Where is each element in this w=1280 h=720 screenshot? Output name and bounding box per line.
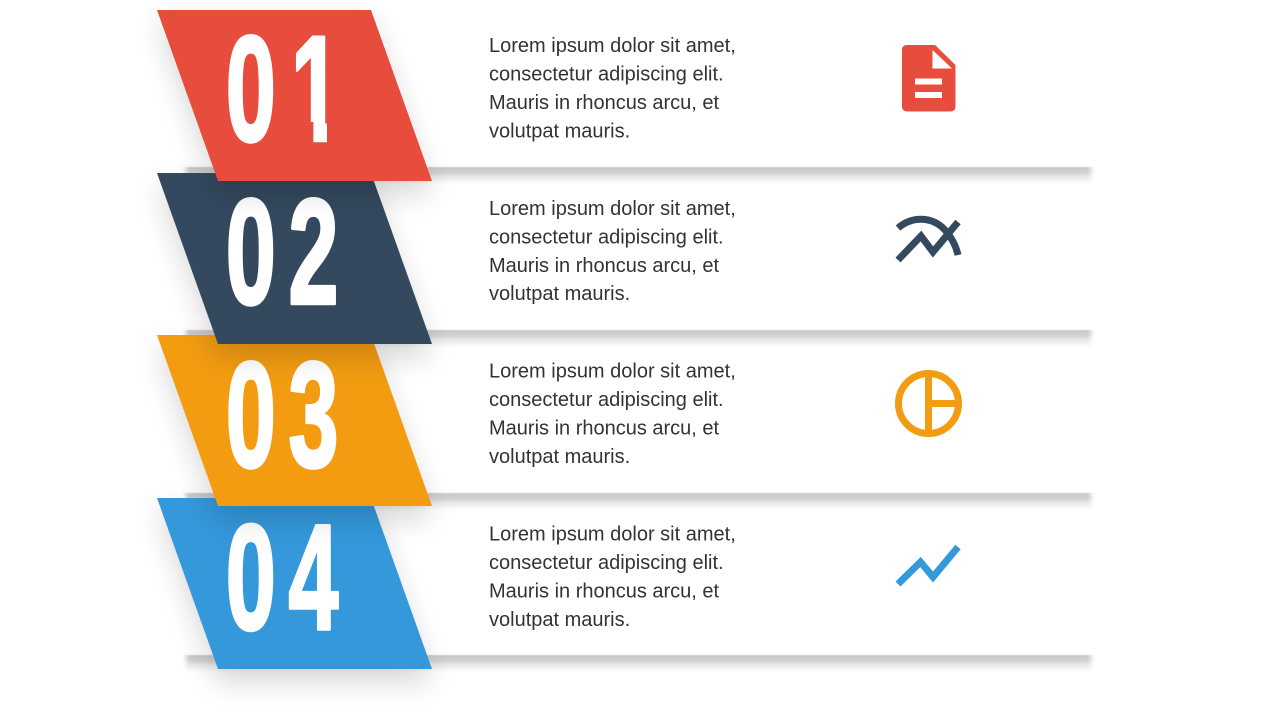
panel 02: navy number tab <box>157 169 432 358</box>
text block 03: volutpat mauris. <box>489 446 630 468</box>
divider shadow bands <box>186 167 1091 673</box>
panel 03: orange number tab <box>157 332 432 520</box>
panel 01: red number tab <box>157 6 432 195</box>
panel 04: blue number tab <box>157 494 432 683</box>
text block 02: Mauris in rhoncus arcu, et <box>489 255 720 277</box>
icon: crossing trend lines <box>898 219 958 260</box>
text block 04: volutpat mauris. <box>489 609 630 631</box>
text block 01: Mauris in rhoncus arcu, et <box>489 92 720 114</box>
text block 04: Lorem ipsum dolor sit amet, <box>489 524 736 546</box>
text block 02: volutpat mauris. <box>489 283 630 305</box>
text block 01: volutpat mauris. <box>489 120 630 142</box>
icon: document <box>902 45 956 112</box>
text block 04: Mauris in rhoncus arcu, et <box>489 580 720 602</box>
text block 03: consectetur adipiscing elit. <box>489 389 724 411</box>
icon: pie chart <box>898 373 958 434</box>
text block 02: Lorem ipsum dolor sit amet, <box>489 198 736 220</box>
panel 03: orange number tab: 03 <box>226 332 351 499</box>
text block 04: consectetur adipiscing elit. <box>489 552 724 574</box>
icon: line chart <box>898 547 958 584</box>
panel 01: red number tab: 01 <box>226 6 356 173</box>
text block 03: Mauris in rhoncus arcu, et <box>489 418 720 440</box>
panel 02: navy number tab: 02 <box>226 169 351 336</box>
text block 01: Lorem ipsum dolor sit amet, <box>489 35 736 57</box>
panel 04: blue number tab: 04 <box>226 494 351 662</box>
text block 02: consectetur adipiscing elit. <box>489 226 724 248</box>
text block 03: Lorem ipsum dolor sit amet, <box>489 360 736 382</box>
text block 01: consectetur adipiscing elit. <box>489 64 724 86</box>
